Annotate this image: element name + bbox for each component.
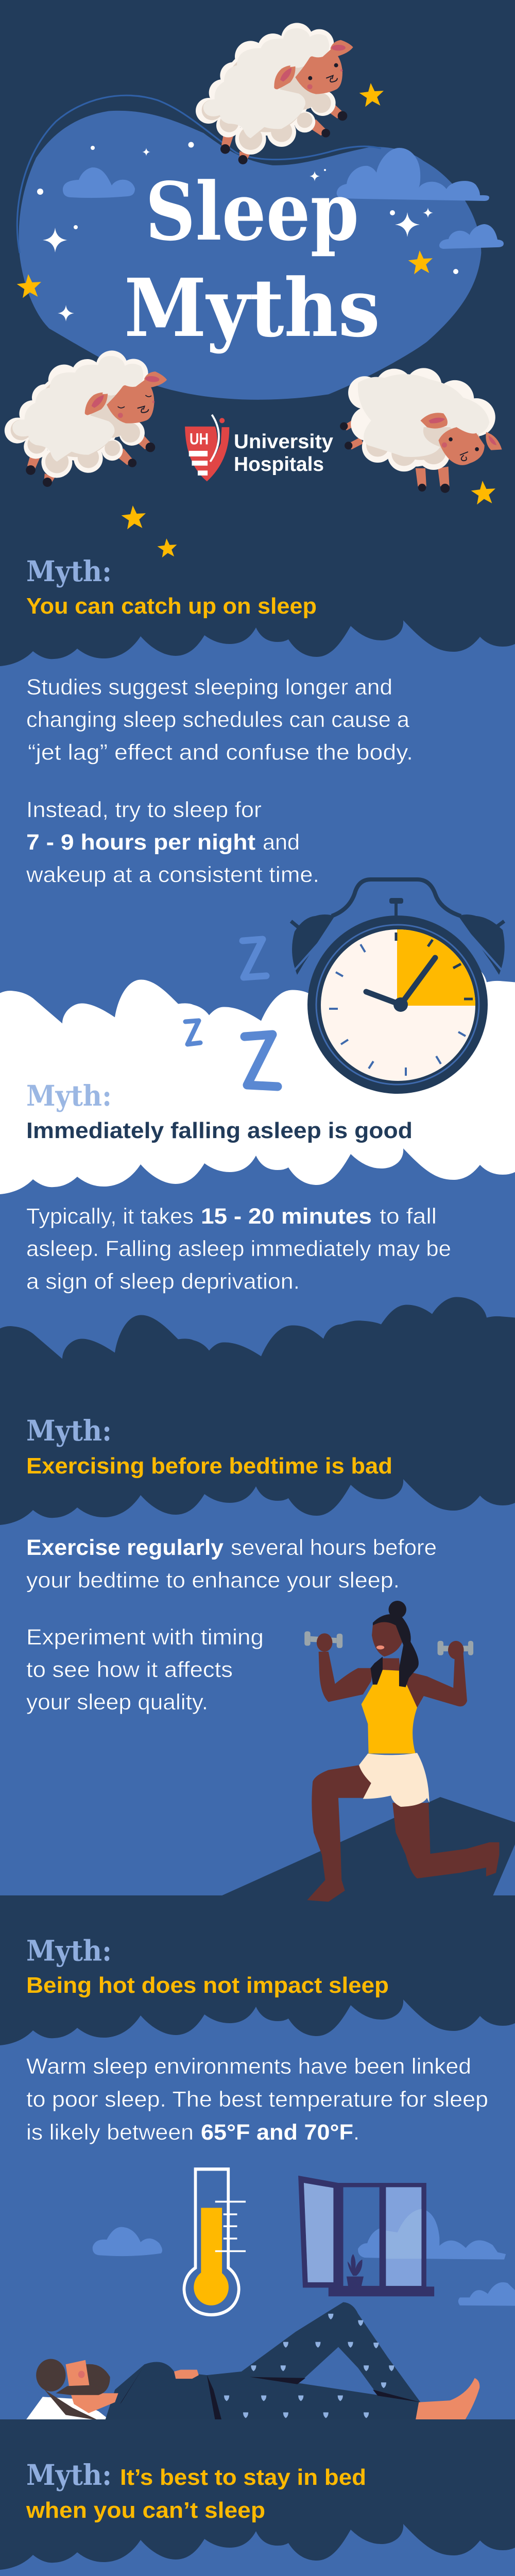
myth 1 heading: Myth: [26, 554, 112, 588]
myth 1 body text: 7 - 9 hours per night [26, 830, 255, 855]
myth 5 heading: Myth: [26, 2458, 112, 2492]
dark band with mountain peak [0, 1797, 515, 2045]
myth 1 body text: Instead, try to sleep for [26, 798, 262, 822]
myth 2 body text [26, 1204, 451, 1294]
myth 3 body text: several hours before [231, 1535, 437, 1560]
myth 2 body text: 15 - 20 minutes [201, 1204, 372, 1229]
myth 4 heading: Myth: [26, 1934, 112, 1967]
myth 4 heading [26, 1934, 389, 1998]
logo: University Hospitals [185, 415, 333, 481]
sheep: top, eyes open [196, 23, 353, 164]
myth 2 heading: Myth: [26, 1079, 112, 1112]
myth 4 body text: . [353, 2120, 359, 2145]
myth 4 body text: is likely between [26, 2120, 194, 2145]
myth 4 body text: 65°F and 70°F [201, 2120, 353, 2145]
myth 3 body text [26, 1535, 437, 1715]
myth 2 body text: to fall [380, 1204, 437, 1229]
sleep z letters [185, 939, 278, 1087]
sheep: right, looking down [340, 368, 502, 493]
myth 5 heading: It’s best to stay in bed [120, 2465, 366, 2490]
myth 3 heading: Myth: [26, 1414, 112, 1447]
myth 1 body text: “jet lag” effect and confuse the body. [28, 740, 413, 765]
myth 1 body text [26, 675, 413, 887]
myth 4 body text [26, 2054, 488, 2145]
myth 3 body text: your sleep quality. [26, 1690, 208, 1715]
thermometer [184, 2169, 246, 2315]
myth 4 body text: Warm sleep environments have been linked [26, 2054, 471, 2079]
dark cloud band: exercise [0, 1297, 515, 1525]
myth 2 body text: asleep. Falling asleep immediately may be [26, 1236, 451, 1261]
header dark cloud background [0, 0, 515, 666]
myth 5 heading: when you can’t sleep [26, 2498, 265, 2523]
logo: University Hospitals: Hospitals [234, 453, 324, 476]
myth 3 heading [26, 1414, 392, 1479]
myth 4 body text: to poor sleep. The best temperature for sleep [26, 2087, 488, 2112]
title: Sleep [145, 164, 359, 259]
myth 2 body text: a sign of sleep deprivation. [26, 1269, 300, 1294]
open window with plant [298, 2176, 434, 2296]
gold stars in hero [16, 82, 496, 558]
myth 3 body text: to see how it affects [26, 1657, 233, 1682]
myth 3 body text: your bedtime to enhance your sleep. [26, 1568, 400, 1593]
myth 1 body text: wakeup at a consistent time. [26, 862, 319, 887]
sparkles and dots [37, 142, 458, 321]
myth 2 body text: Typically, it takes [26, 1204, 194, 1229]
myth 1 body text: and [263, 830, 300, 855]
hero illustration: blue blob [17, 95, 481, 400]
clouds in hero [63, 148, 504, 249]
dark band: stay in bed [0, 2419, 515, 2570]
myth 2 heading [26, 1079, 413, 1143]
illustration: woman exercising with dumbbells [304, 1601, 499, 1902]
myth 3 heading: Exercising before bedtime is bad [26, 1453, 392, 1479]
logo: University Hospitals: UH [190, 429, 209, 448]
myth 4 heading: Being hot does not impact sleep [26, 1973, 389, 1998]
myth 5 heading [26, 2458, 366, 2523]
myth 3 body text: Exercise regularly [26, 1535, 224, 1560]
sheep: left, eyes closed [0, 342, 169, 497]
myth 3 body text: Experiment with timing [26, 1625, 264, 1650]
myth 2 heading: Immediately falling asleep is good [26, 1118, 413, 1143]
temperature scene clouds [93, 2209, 515, 2306]
illustration: man lying down with pajamas [26, 2302, 479, 2420]
title [124, 164, 380, 355]
white cloud band [0, 961, 515, 1194]
alarm clock [291, 879, 505, 1094]
myth 1 heading [26, 554, 317, 619]
myth 1 body text: changing sleep schedules can cause a [26, 707, 409, 732]
myth 1 body text: Studies suggest sleeping longer and [26, 675, 392, 700]
logo: University Hospitals: University [234, 431, 333, 453]
title: Myths [124, 261, 380, 355]
myth 1 heading: You can catch up on sleep [26, 594, 317, 619]
